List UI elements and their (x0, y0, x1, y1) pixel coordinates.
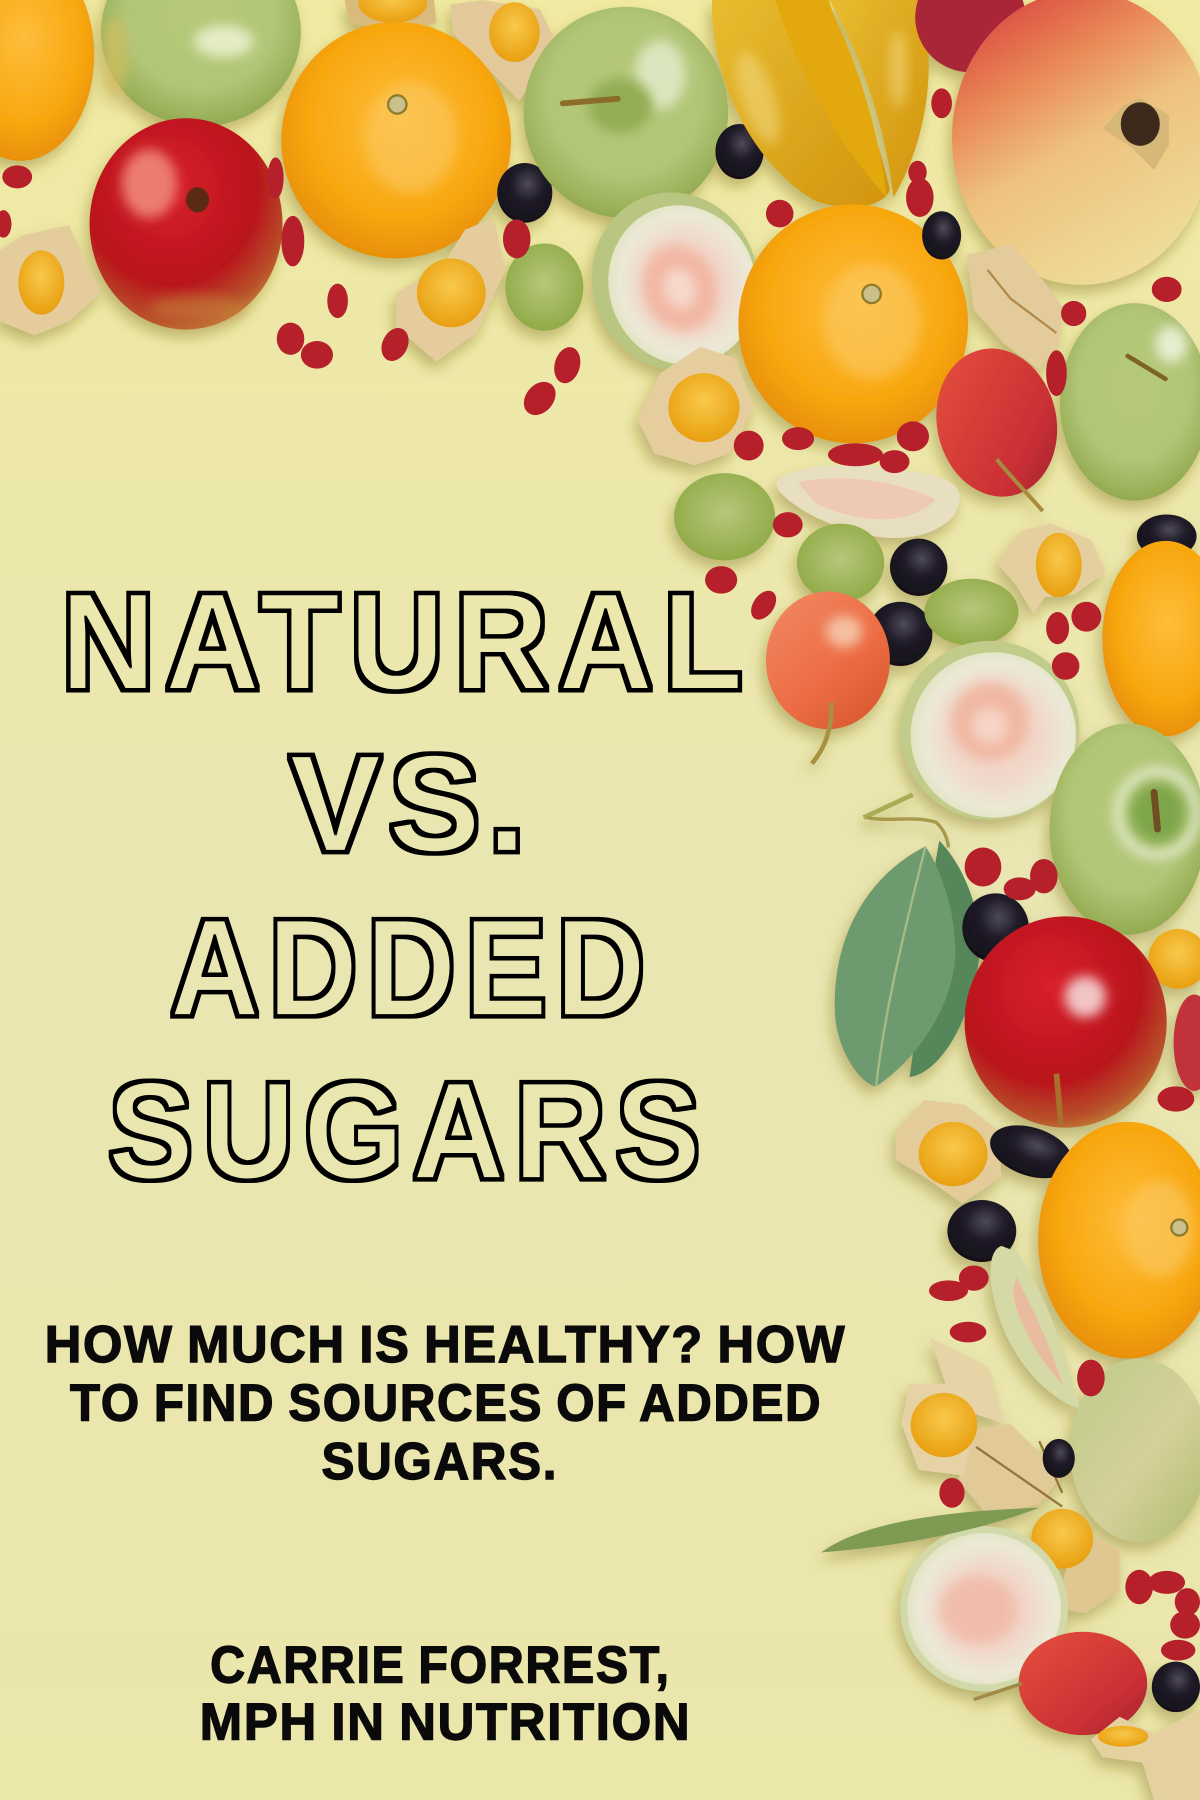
title (61, 565, 743, 1208)
red fruit: right edge (1174, 994, 1200, 1091)
husk flower: lower (930, 1338, 1062, 1516)
pomegranate: top right (952, 0, 1200, 285)
fruit border: bottom right (821, 1100, 1200, 1800)
grape: left (674, 473, 775, 560)
berry: right middle (1148, 929, 1200, 989)
husk: bottom right corner (1091, 1709, 1200, 1800)
black grape: right edge (1137, 514, 1197, 558)
black grape: bottom right (1152, 1662, 1200, 1712)
title line: SUGARS: SUGARS (108, 1055, 701, 1208)
title line: VS.: VS. (289, 727, 526, 881)
black grape: upper right (922, 211, 961, 260)
subtitle line 2: TO FIND SOURCES OF ADDED (70, 1373, 822, 1431)
guava half: middle (864, 641, 1079, 820)
red apple: bottom (974, 1632, 1147, 1735)
husk berry: upper centre (396, 218, 505, 362)
guava wedge (990, 1246, 1079, 1408)
husk berry: lower (896, 1100, 1001, 1203)
orange: top left corner (0, 0, 94, 161)
husk berry: centre (637, 347, 754, 465)
black grape: lower (947, 1200, 1016, 1262)
green apple: right middle (1050, 723, 1200, 935)
red apple: upper left (90, 118, 282, 330)
author name: CARRIE FORREST, (210, 1635, 671, 1693)
orange: upper centre left (281, 22, 511, 258)
author (200, 1635, 691, 1751)
green apple: top left (101, 0, 301, 126)
orange: upper right centre (738, 204, 968, 443)
guava half: bottom (900, 1526, 1068, 1691)
husk berry: top centre (344, 0, 436, 32)
green apple: upper centre (524, 7, 728, 218)
subtitle line 1: HOW MUCH IS HEALTHY? HOW (45, 1315, 846, 1373)
guava slice: centre (776, 466, 960, 538)
black grape behind star fruit (715, 124, 764, 179)
red apple: lower right (965, 916, 1167, 1128)
green grape: upper (505, 243, 583, 331)
orange: bottom right (1038, 1122, 1200, 1358)
author credential: MPH IN NUTRITION (200, 1693, 691, 1751)
guava whole (1070, 1358, 1200, 1542)
husk: bottom (1056, 1527, 1120, 1613)
husk berry: right (997, 524, 1106, 614)
blackberry: upper centre (497, 163, 552, 223)
star fruit (712, 0, 929, 207)
fruit border: right middle (674, 473, 1200, 1128)
husk flower: upper right (967, 245, 1063, 370)
black grape: middle (890, 539, 947, 596)
husk berry: left edge (0, 225, 101, 335)
husk berry: top (450, 0, 558, 101)
green apple: right edge (1060, 303, 1200, 501)
thin leaf (821, 1508, 1039, 1553)
husk berry (901, 1384, 977, 1476)
subtitle (45, 1315, 846, 1490)
subtitle line 3: SUGARS. (322, 1432, 558, 1490)
black grape: behind husk (1043, 1439, 1075, 1478)
grape: right (924, 579, 1019, 645)
fruit border: top (0, 0, 1200, 538)
black grape: lower (868, 602, 932, 666)
guava leaf: front (835, 818, 955, 1086)
red fruit: top right (915, 0, 1025, 72)
orange: right edge (1102, 541, 1200, 736)
berry: bottom (1031, 1509, 1093, 1569)
guava leaf: back (909, 841, 980, 1077)
black grape: by leaf (962, 893, 1029, 962)
coral apple (766, 591, 890, 764)
title line: NATURAL: NATURAL (61, 565, 743, 719)
grape: middle (797, 524, 884, 602)
guava half: upper (569, 171, 782, 392)
red small apple: right (923, 337, 1071, 511)
title line: ADDED: ADDED (170, 890, 645, 1045)
black oval fruit (983, 1116, 1079, 1188)
